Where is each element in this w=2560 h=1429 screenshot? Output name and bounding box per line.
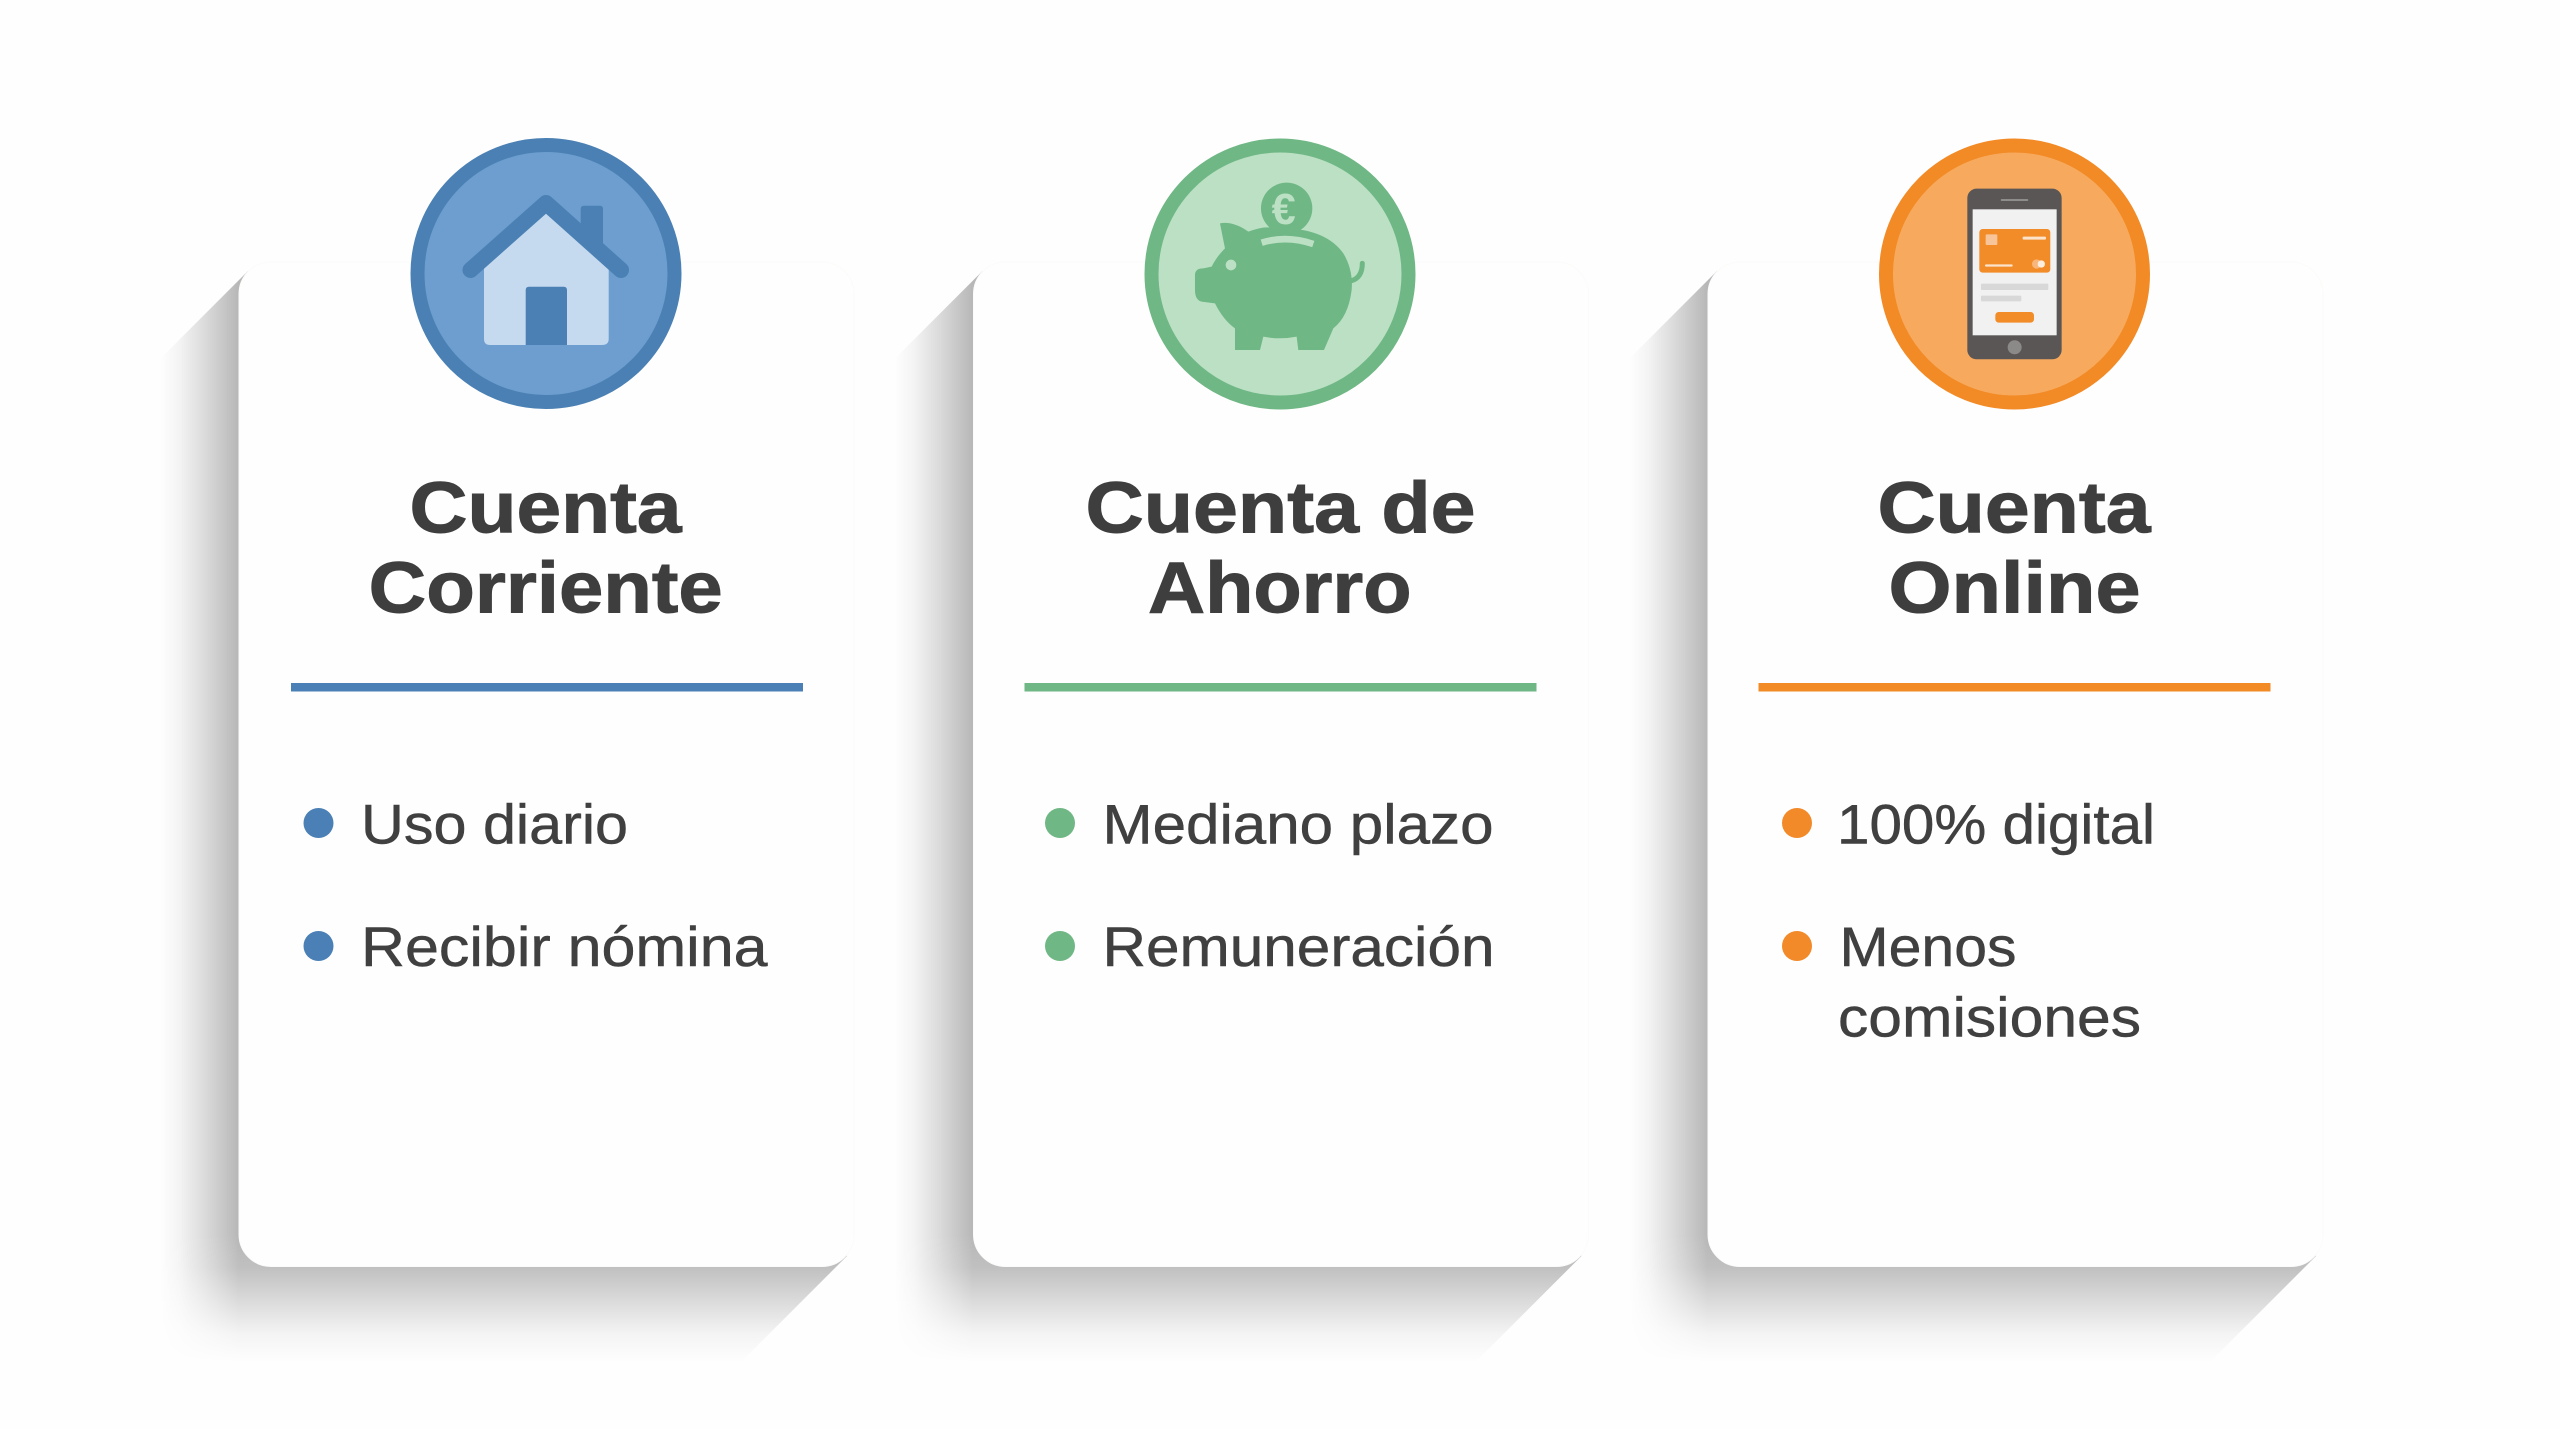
heading: Ahorro: [1148, 548, 1412, 628]
card: [239, 262, 854, 1266]
bullet: Menos comisiones: Menos: [1840, 915, 2016, 978]
panel: Cuenta Corriente: [160, 145, 854, 1365]
divider: [1758, 683, 2270, 692]
card shadow: [160, 271, 847, 1365]
heading: [369, 468, 723, 628]
bullet: Menos comisiones: [1782, 915, 2141, 1048]
panel: Cuenta de Ahorro: [894, 146, 1588, 1365]
heading: Corriente: [369, 548, 723, 628]
heading: Cuenta: [410, 468, 683, 548]
card: [1708, 262, 2323, 1266]
icon: house: [418, 145, 674, 402]
card shadow: [894, 271, 1582, 1365]
card: [974, 262, 1588, 1266]
heading: Online: [1888, 548, 2140, 628]
heading: Cuenta: [1878, 468, 2152, 548]
bullet: Remuneración: Remuneración: [1102, 915, 1494, 978]
heading: [1086, 468, 1476, 628]
panel: Cuenta Online: [1629, 146, 2323, 1365]
divider: [1024, 683, 1536, 692]
bullet: Menos comisiones: comisiones: [1838, 986, 2141, 1048]
bullet: 100% digital: 100% digital: [1837, 792, 2155, 856]
icon: smartphone with card: [1886, 146, 2143, 402]
bullet: Mediano plazo: Mediano plazo: [1102, 792, 1494, 856]
bullet: Uso diario: Uso diario: [361, 792, 628, 856]
icon: piggy bank: [1152, 146, 1408, 402]
icon: piggy bank: €: [1272, 186, 1296, 234]
heading: [1878, 468, 2152, 628]
heading: Cuenta de: [1086, 468, 1476, 548]
divider: [291, 683, 803, 692]
card shadow: [1629, 271, 2316, 1365]
bullet: Recibir nómina: Recibir nómina: [361, 915, 768, 978]
